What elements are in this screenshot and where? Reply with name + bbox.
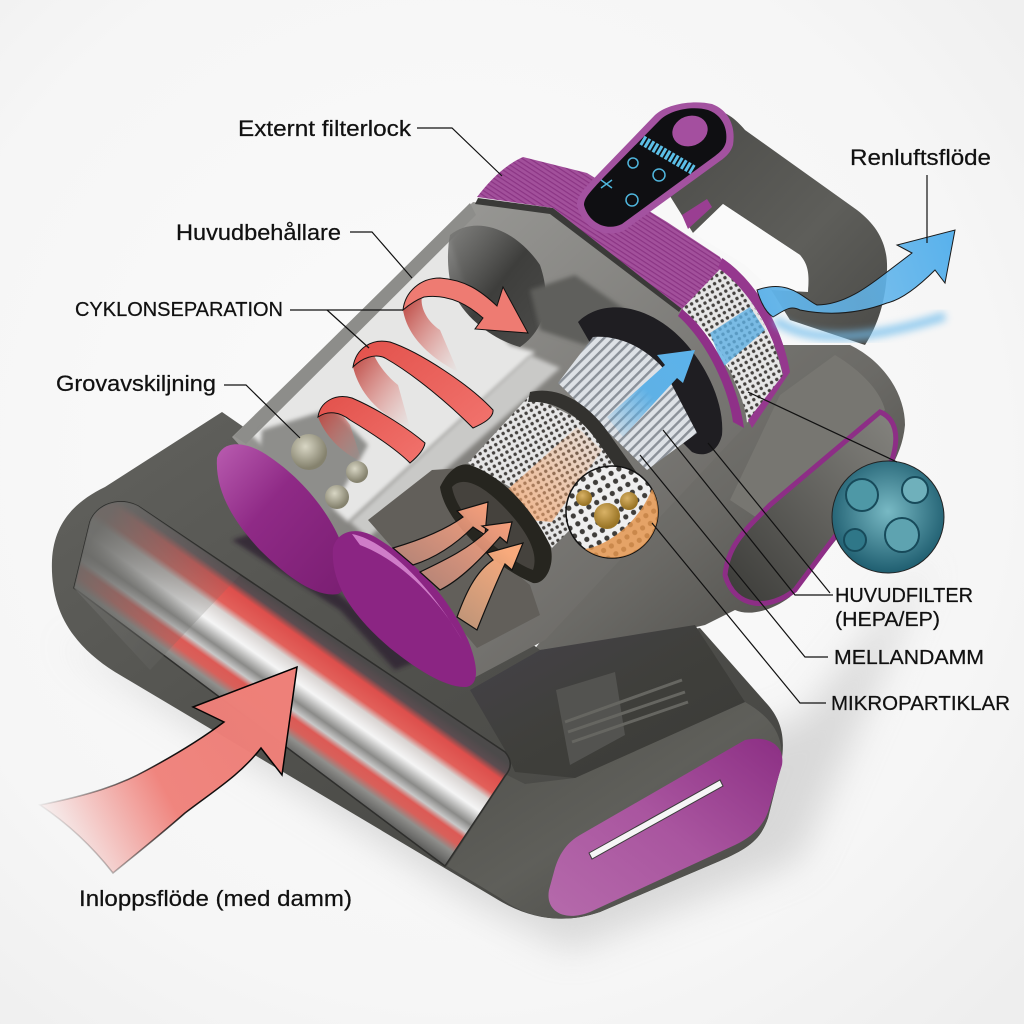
- dust chamber shade: [258, 408, 368, 522]
- inner mechanism: [530, 275, 640, 345]
- cyclone swirls: [318, 278, 528, 463]
- dark front ring: [440, 464, 552, 583]
- magnifier: micro particles: [566, 466, 658, 558]
- status icons: [601, 158, 665, 206]
- label: MELLANDAMM: MELLANDAMM: [834, 647, 984, 669]
- blue up arrow: [607, 350, 695, 437]
- light bar: [589, 780, 723, 859]
- magnifier: bacteria: [832, 461, 944, 573]
- swirl 2: [353, 341, 493, 428]
- swirl 3: [318, 397, 425, 463]
- power button: [668, 111, 712, 151]
- base nozzle: [52, 412, 783, 919]
- label: (HEPA/EP): (HEPA/EP): [835, 609, 940, 631]
- glass rim stripe: [234, 203, 476, 444]
- air wisps: [775, 316, 945, 337]
- swirl tail fades: [403, 296, 458, 372]
- cap highlight: [352, 534, 462, 640]
- orange sector: [585, 489, 658, 558]
- handle opening: [693, 204, 808, 292]
- cylinder top band: [528, 391, 637, 482]
- roller left glass: [74, 502, 240, 670]
- label: Renluftsflöde: Renluftsflöde: [850, 145, 991, 170]
- control panel: [577, 102, 734, 234]
- lower light band: [350, 355, 560, 538]
- blue band on mesh: [710, 307, 765, 367]
- perforated cylinder: [440, 391, 637, 583]
- clean air arrow: [757, 230, 955, 337]
- light glass band: [248, 212, 535, 522]
- label: MIKROPARTIKLAR: MIKROPARTIKLAR: [831, 693, 1010, 715]
- tray ribs: [565, 680, 688, 742]
- swirl 1 arrow: [403, 278, 528, 333]
- pleated HEPA filter: [558, 337, 697, 470]
- label: Grovavskiljning: Grovavskiljning: [56, 371, 216, 396]
- leader lines: [224, 128, 927, 703]
- front purple cap: [548, 739, 782, 916]
- collar inner arc: [678, 309, 744, 428]
- debris area: [368, 468, 540, 648]
- label: CYKLONSEPARATION: CYKLONSEPARATION: [75, 299, 283, 321]
- collar outer arc: [718, 258, 790, 428]
- dark top strip: [475, 198, 683, 312]
- shadow under caps: [232, 530, 420, 670]
- dark filter ring: [578, 307, 722, 454]
- purple end caps: [217, 444, 476, 687]
- front rim: [447, 702, 782, 919]
- dark tray: [470, 625, 745, 778]
- coarse dust balls: [291, 434, 368, 509]
- tray mesh patch: [556, 672, 625, 765]
- floor shadow: [60, 560, 930, 950]
- label: HUVUDFILTER: HUVUDFILTER: [835, 585, 973, 607]
- label: Huvudbehållare: Huvudbehållare: [176, 220, 341, 245]
- main container: [232, 198, 760, 680]
- rear body: [530, 345, 905, 655]
- inlet arrow: [40, 667, 297, 873]
- purple side loop: [725, 412, 896, 604]
- upper dark dome: [448, 226, 546, 347]
- label: Externt filterlock: Externt filterlock: [238, 116, 412, 141]
- top purple collar: [477, 157, 790, 428]
- battery level: [642, 140, 693, 170]
- small purple latch: [682, 199, 712, 229]
- orange arrows: [393, 502, 523, 630]
- orange glow: [507, 427, 602, 522]
- roller window: [74, 502, 510, 866]
- handle: [660, 105, 887, 345]
- label: Inloppsflöde (med damm): Inloppsflöde (med damm): [79, 886, 352, 911]
- clean filter mesh: [680, 267, 783, 423]
